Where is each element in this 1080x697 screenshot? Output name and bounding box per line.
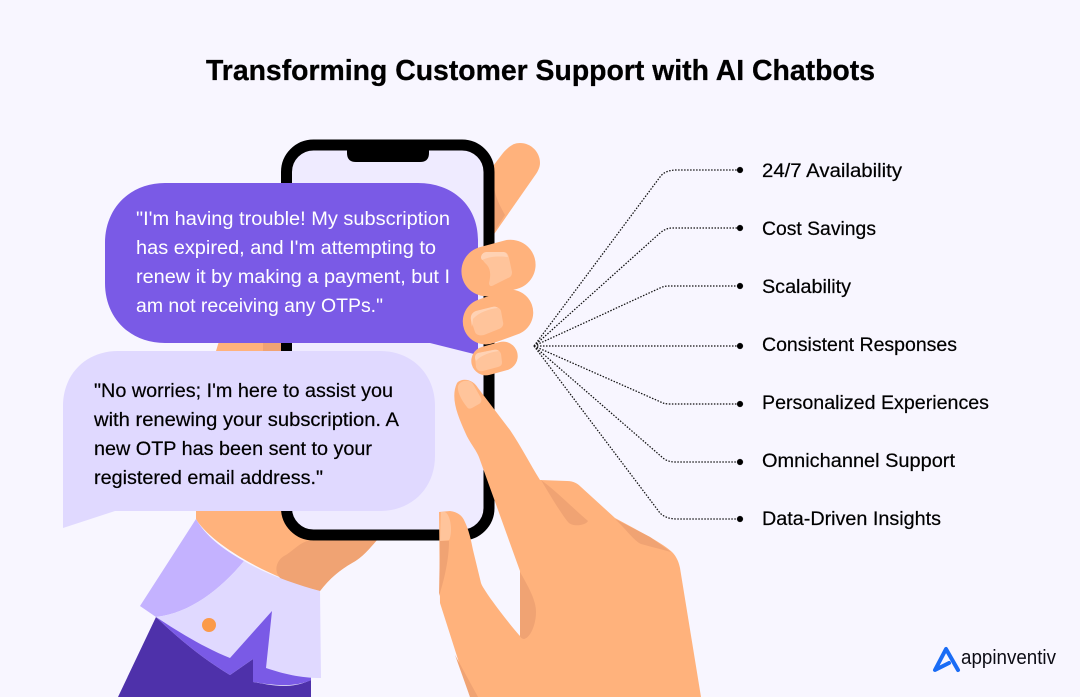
palm peek between bubbles <box>216 338 292 351</box>
index nail <box>458 381 481 409</box>
feature: personalized experiences: Personalized Experiences <box>762 393 989 414</box>
bot message text: registered email address." <box>94 468 323 489</box>
sleeve lining <box>156 600 311 685</box>
feature connector lines <box>534 170 740 519</box>
feature: scalability: Scalability <box>762 277 852 298</box>
gripping fingers <box>456 234 541 379</box>
bot message text: new OTP has been sent to your <box>94 439 373 460</box>
wrist shadow <box>455 655 478 697</box>
finger one <box>456 234 541 302</box>
phone frame and screen <box>286 145 489 535</box>
user message text: "I'm having trouble! My subscription <box>136 209 450 230</box>
palm below bubble <box>196 505 377 591</box>
knuckle shadow two <box>615 519 671 552</box>
user message text: has expired, and I'm attempting to <box>136 238 436 259</box>
feature: omnichannel support: Omnichannel Support <box>762 451 956 472</box>
user message text <box>136 209 450 317</box>
phone <box>286 145 489 535</box>
illustration: holding hand behind phone <box>196 143 540 591</box>
dark sleeve <box>118 617 311 697</box>
user message text: renew it by making a payment, but I <box>136 267 450 288</box>
feature: 24/7 availability: 24/7 Availability <box>762 161 903 182</box>
bot bubble shape <box>63 351 435 528</box>
pointing hand <box>439 380 701 697</box>
finger two <box>456 283 540 351</box>
phone notch <box>347 148 429 162</box>
finger three <box>468 338 521 379</box>
title: Transforming Customer Support with AI Chatbots <box>206 55 875 87</box>
upper fingertip behind phone <box>490 143 540 240</box>
shirt cuff and sleeve <box>118 519 321 697</box>
cuff button <box>202 618 216 632</box>
thumb shadow <box>439 541 449 596</box>
fingertip shadow <box>494 188 505 232</box>
bot message text: "No worries; I'm here to assist you <box>94 381 393 402</box>
cuff inner <box>140 519 244 617</box>
nail two <box>471 307 503 335</box>
feature: data-driven insights: Data-Driven Insights <box>762 509 941 530</box>
feature: consistent responses: Consistent Responses <box>762 335 957 356</box>
user message text: am not receiving any OTPs." <box>136 296 383 317</box>
feature: cost savings: Cost Savings <box>762 219 876 240</box>
knuckle shadow one <box>541 480 588 525</box>
cuff front <box>156 561 321 678</box>
thumb nail <box>440 512 451 541</box>
bot message text <box>93 381 399 489</box>
logo wordmark: appinventiv <box>961 647 1056 669</box>
logo <box>935 647 1056 670</box>
feature list <box>737 161 989 530</box>
user bubble shape <box>105 183 478 355</box>
user chat bubble <box>105 183 478 355</box>
nail three <box>475 350 502 371</box>
web shadow <box>520 572 536 639</box>
bot chat bubble <box>63 351 435 528</box>
palm peek shadow <box>263 338 291 351</box>
logo mark <box>935 649 958 670</box>
nail one <box>481 252 512 286</box>
bot message text: with renewing your subscription. A <box>93 410 399 431</box>
hand shape <box>439 380 701 697</box>
palm shadow <box>276 540 377 591</box>
